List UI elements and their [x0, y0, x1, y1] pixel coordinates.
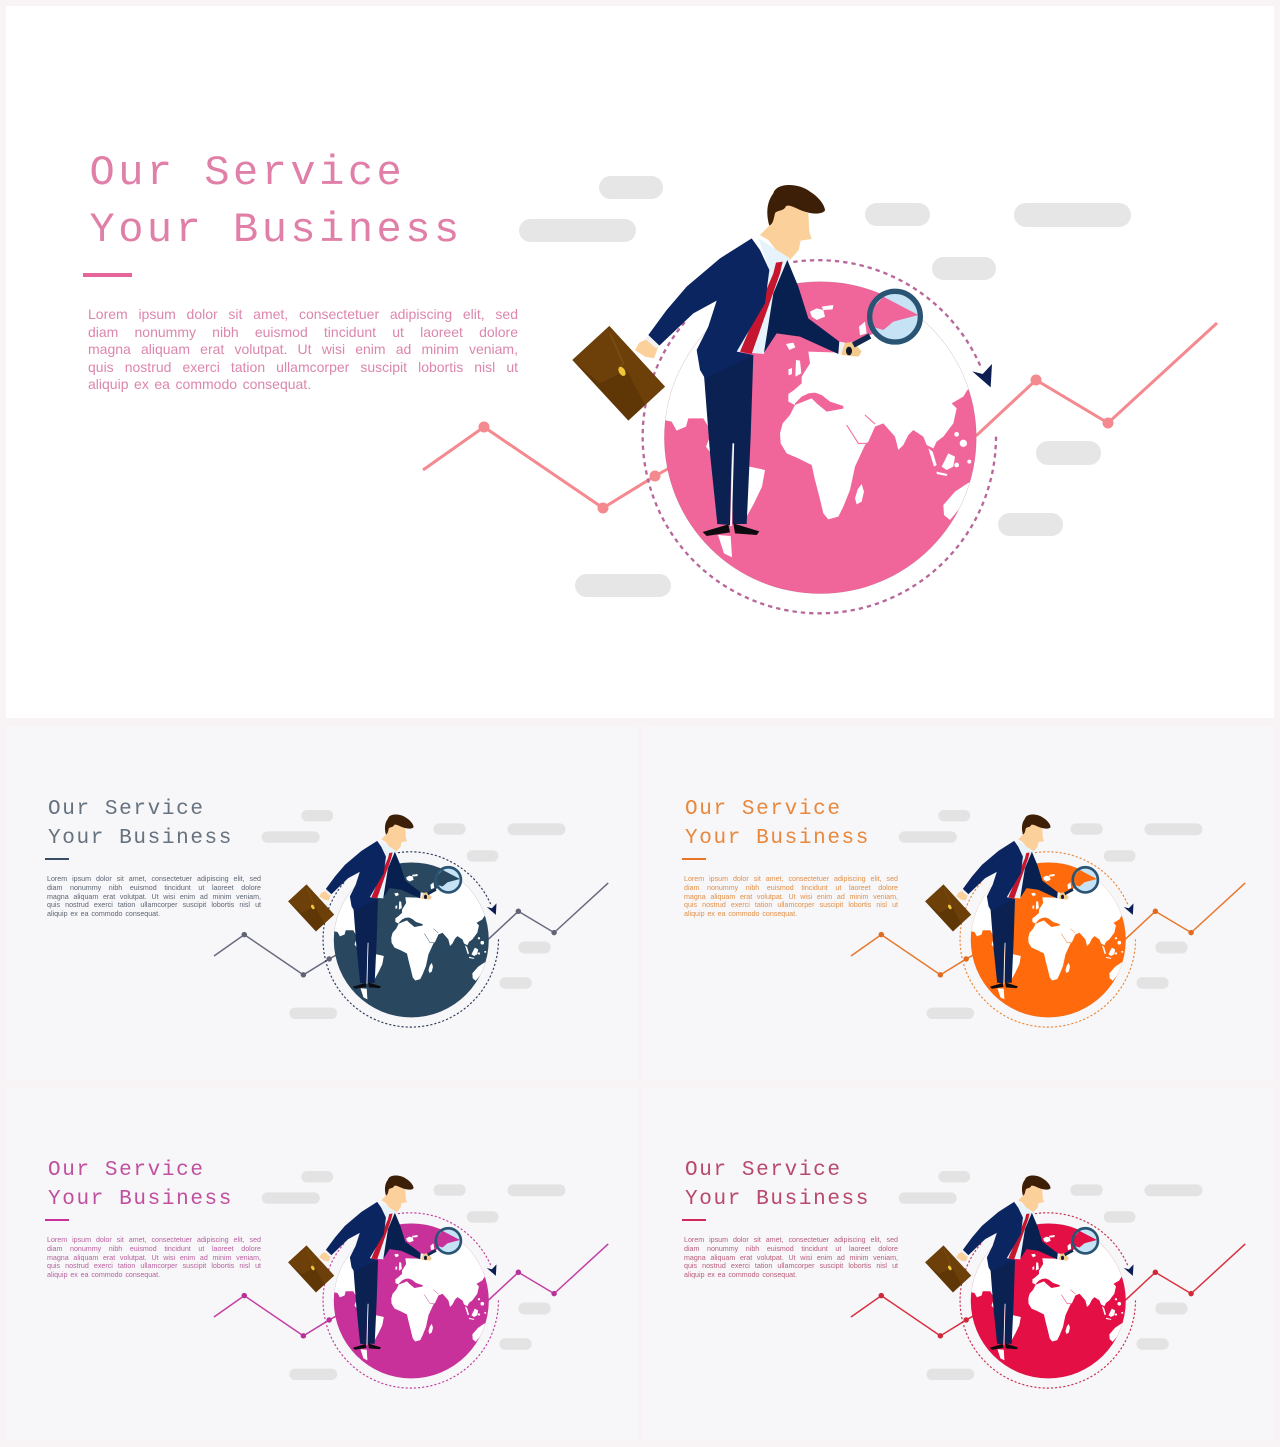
title: Your Business: [48, 1188, 233, 1211]
body text: magna aliquam erat volutpat. Ut wisi enim ad minim veniam,: [684, 1254, 898, 1262]
globe outline: [664, 282, 976, 594]
illustration: magenta globe scene: [214, 1171, 609, 1389]
title: Our Service: [48, 1159, 205, 1182]
trousers: [704, 355, 753, 525]
body text: Lorem ipsum dolor sit amet, consectetuer adipiscing elit, sed: [684, 1236, 898, 1244]
body text: magna aliquam erat volutpat. Ut wisi enim ad minim veniam,: [47, 892, 261, 900]
globe with world map: [657, 270, 1000, 594]
title: [48, 1159, 233, 1211]
neck and face: [760, 203, 812, 260]
tie: [740, 262, 783, 354]
body text: diam nonummy nibh euismod tincidunt ut laoreet dolore: [684, 884, 898, 892]
Australia: [943, 480, 973, 520]
businessman figure: [572, 185, 920, 536]
title: Our Service: [48, 798, 205, 821]
dashed ring around globe: [643, 260, 996, 613]
panel: large pink slide: [6, 6, 1274, 718]
Mediterranean Sea: [795, 393, 843, 412]
title: Your Business: [685, 827, 870, 850]
body text: aliquip ex ea commodo consequat.: [684, 910, 797, 918]
illustration: orange globe scene: [850, 810, 1246, 1028]
body text: [47, 875, 261, 918]
body text: [88, 306, 518, 392]
body text: diam nonummy nibh euismod tincidunt ut laoreet dolore: [47, 1245, 261, 1253]
title underline: [682, 1219, 706, 1221]
panel: magenta variant: [6, 1087, 637, 1441]
briefcase: [572, 326, 665, 421]
body text: aliquip ex ea commodo consequat.: [47, 910, 160, 918]
title: [685, 1159, 870, 1211]
panel: red variant: [643, 1087, 1274, 1441]
body text: diam nonummy nibh euismod tincidunt ut laoreet dolore: [684, 1245, 898, 1253]
South America: [740, 465, 765, 520]
body text: quis nostrud exerci tation ullamcorper suscipit lobortis nisl ut: [684, 901, 898, 909]
title underline: [45, 1219, 69, 1221]
body text: Lorem ipsum dolor sit amet, consectetuer adipiscing elit, sed: [47, 875, 261, 883]
title: Our Service: [685, 798, 842, 821]
body text: Lorem ipsum dolor sit amet, consectetuer adipiscing elit, sed: [47, 1236, 261, 1244]
hair: [767, 185, 825, 226]
grey cloud pills: [519, 176, 1131, 597]
illustration: navy globe scene: [214, 810, 609, 1028]
body text: aliquip ex ea commodo consequat.: [684, 1271, 797, 1279]
magnifying glass: [853, 291, 920, 345]
panel: orange variant: [643, 726, 1274, 1080]
illustration: red globe scene: [850, 1171, 1246, 1389]
arrow head: [972, 364, 992, 387]
body text: magna aliquam erat volutpat. Ut wisi enim ad minim veniam,: [88, 341, 518, 357]
Madagascar: [855, 484, 864, 504]
title: Your Business: [90, 206, 463, 254]
body text: [684, 875, 898, 918]
body text: quis nostrud exerci tation ullamcorper suscipit lobortis nisl ut: [88, 359, 518, 375]
Eurasia and Africa: [780, 312, 1000, 519]
title: Our Service: [685, 1159, 842, 1182]
body text: aliquip ex ea commodo consequat.: [88, 376, 311, 392]
body text: quis nostrud exerci tation ullamcorper suscipit lobortis nisl ut: [47, 901, 261, 909]
title underline: [83, 273, 132, 277]
shoes: [703, 523, 759, 536]
jacket right and arm: [764, 260, 839, 354]
body text: [47, 1236, 261, 1279]
title underline: [45, 858, 69, 860]
body text: [684, 1236, 898, 1279]
title: [48, 798, 233, 850]
body text: quis nostrud exerci tation ullamcorper suscipit lobortis nisl ut: [47, 1262, 261, 1270]
North America: [657, 270, 780, 487]
right hand: [842, 342, 862, 357]
title: [90, 149, 463, 254]
title underline: [682, 858, 706, 860]
body text: magna aliquam erat volutpat. Ut wisi enim ad minim veniam,: [47, 1254, 261, 1262]
left hand: [635, 338, 658, 358]
body text: Lorem ipsum dolor sit amet, consectetuer adipiscing elit, sed: [684, 875, 898, 883]
shirt: [735, 238, 790, 354]
islands: [810, 308, 825, 320]
title: [685, 798, 870, 850]
jacket left: [648, 238, 769, 378]
body text: Lorem ipsum dolor sit amet, consectetuer adipiscing elit, sed: [88, 306, 518, 322]
panel: navy variant: [6, 726, 637, 1080]
Indochina: [928, 448, 937, 467]
body text: magna aliquam erat volutpat. Ut wisi enim ad minim veniam,: [684, 892, 898, 900]
title: Your Business: [685, 1188, 870, 1211]
illustration: large scene with globe and businessman: [422, 176, 1218, 614]
body text: quis nostrud exerci tation ullamcorper suscipit lobortis nisl ut: [684, 1262, 898, 1270]
title: Your Business: [48, 827, 233, 850]
body text: diam nonummy nibh euismod tincidunt ut laoreet dolore: [47, 884, 261, 892]
title: Our Service: [90, 149, 405, 197]
body text: aliquip ex ea commodo consequat.: [47, 1271, 160, 1279]
line chart with markers: [423, 323, 1217, 514]
body text: diam nonummy nibh euismod tincidunt ut laoreet dolore: [88, 324, 518, 340]
Red Sea and Persian Gulf: [847, 415, 875, 443]
